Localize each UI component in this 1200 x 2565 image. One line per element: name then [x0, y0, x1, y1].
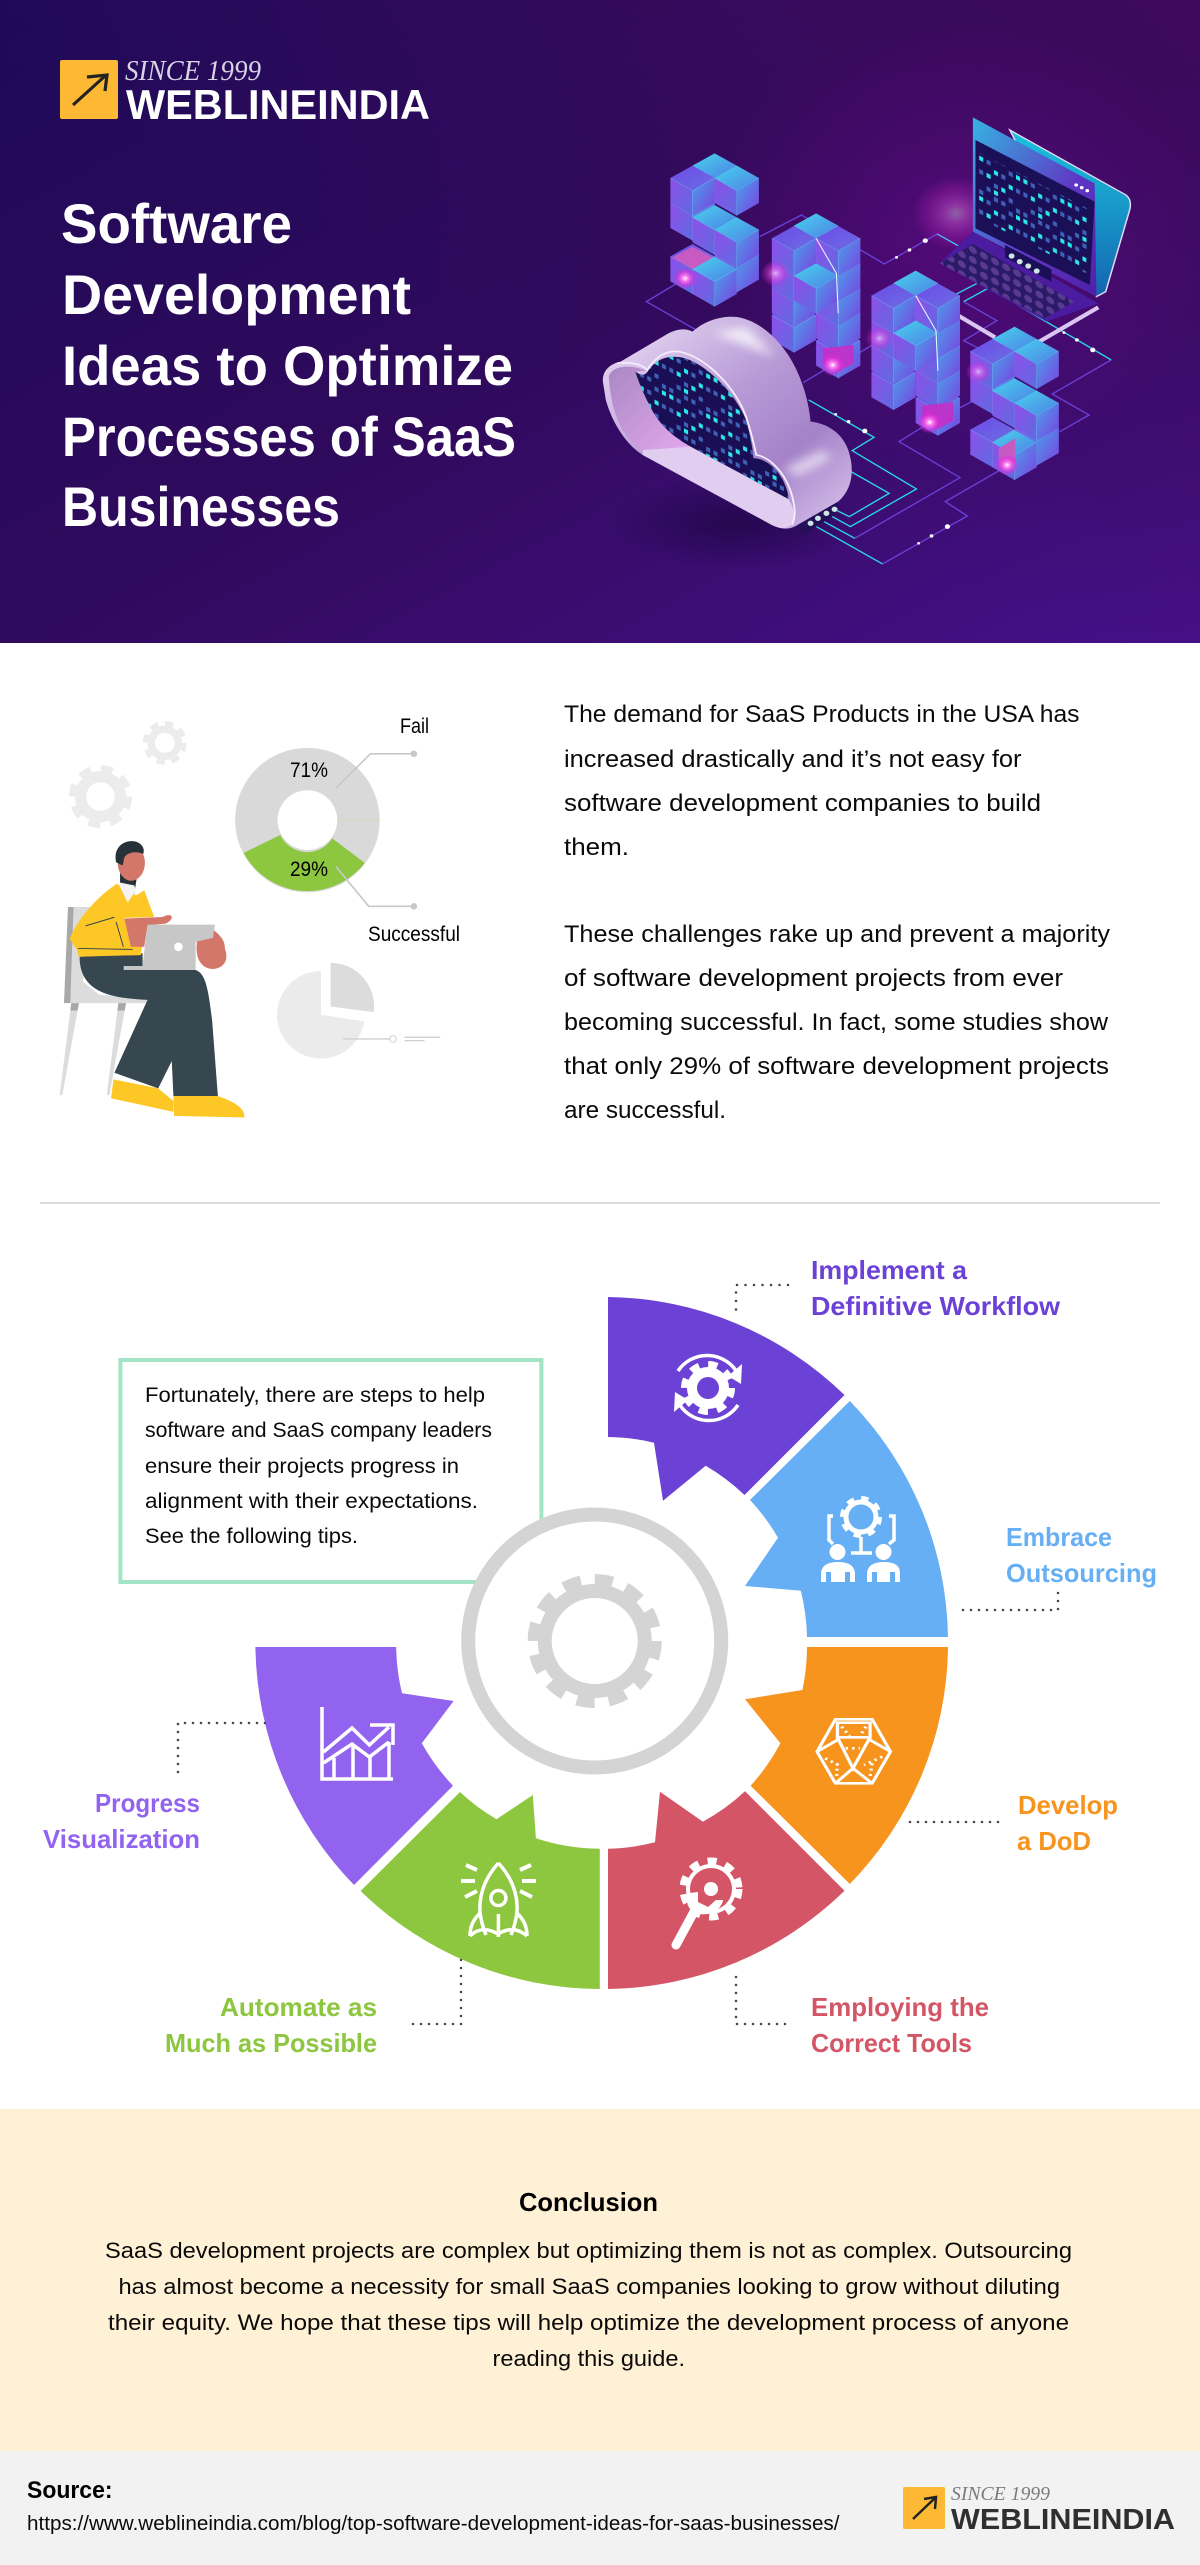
chart: donut 71% fail, 29% successful — [235, 715, 460, 946]
chart: donut 71% fail, 29% successful: Successful — [368, 923, 460, 946]
text block: intro paragraphs: them. — [564, 834, 629, 861]
label: Definitive Workflow — [811, 1291, 1061, 1321]
text block: intro paragraphs: These challenges rake up and prevent a majority — [564, 921, 1110, 948]
circuit sparks — [834, 238, 1095, 545]
logo: Weblineindia: SINCE 1999 — [125, 56, 261, 87]
icon: rocket — [461, 1863, 536, 1937]
callout: intro to tips: ensure their projects progress in — [145, 1455, 459, 1478]
icon: wrench and gear — [676, 1861, 739, 1945]
label: Progress — [95, 1788, 200, 1818]
illustration: man with tablet on a chair — [60, 841, 244, 1118]
logo: Weblineindia footer — [903, 2483, 1175, 2536]
panel: six tips wheel — [43, 1255, 1157, 2058]
label — [1017, 1790, 1118, 1856]
illustration: isometric SaaS letters, cloud and laptop — [603, 117, 1130, 570]
isometric letter A — [761, 213, 860, 378]
segment: Progress Visualization — [43, 1647, 454, 1885]
icon: team with gear — [821, 1498, 900, 1582]
leader line — [178, 1723, 265, 1775]
text block: intro paragraphs: The demand for SaaS Products in the USA has — [564, 701, 1080, 728]
label: a DoD — [1017, 1826, 1091, 1856]
text block: intro paragraphs: that only 29% of software development projects — [564, 1053, 1109, 1080]
chart: donut 71% fail, 29% successful: Fail — [400, 715, 429, 738]
logo: Weblineindia footer: WEBLINEINDIA — [951, 2504, 1175, 2536]
title: Processes of SaaS — [62, 405, 516, 468]
laptop — [912, 117, 1130, 343]
chart: donut 71% fail, 29% successful: 71% — [290, 759, 328, 782]
label: Implement a — [811, 1255, 968, 1285]
title: Ideas to Optimize — [62, 334, 513, 397]
icon: rising bar chart — [322, 1707, 393, 1779]
callout: intro to tips: See the following tips. — [145, 1525, 358, 1548]
source link: https://www.weblineindia.com/blog/top-software-development-ideas-for-saas-businesses/ — [27, 2513, 840, 2535]
segment: Implement a Definitive Workflow — [608, 1255, 1061, 1501]
text block: conclusion: SaaS development projects are complex but optimizing them is not as complex. Outsourcing — [105, 2238, 1072, 2263]
callout: intro to tips: Fortunately, there are steps to help — [145, 1384, 485, 1407]
leader line — [910, 1821, 999, 1823]
panel: 29% success section — [60, 701, 1110, 1124]
title: Businesses — [62, 475, 340, 538]
icon: gear with cycle arrows — [674, 1355, 742, 1421]
label: Employing the — [811, 1992, 989, 2022]
text block: intro paragraphs: software development companies to build — [564, 790, 1041, 817]
isometric letter S — [670, 153, 759, 307]
label — [43, 1788, 200, 1854]
panel: conclusion — [0, 2109, 1200, 2451]
title: Software — [61, 192, 292, 255]
label — [811, 1992, 989, 2058]
leader line — [736, 1977, 788, 2024]
title: Development — [62, 263, 411, 326]
label: Correct Tools — [811, 2028, 972, 2058]
text block: intro paragraphs: are successful. — [564, 1097, 726, 1124]
label — [165, 1992, 377, 2058]
illustration: pale pie chart — [277, 963, 440, 1059]
label: Embrace — [1006, 1522, 1112, 1552]
label — [1006, 1522, 1157, 1588]
text block: conclusion: has almost become a necessity for small SaaS companies looking to grow without diluting — [118, 2274, 1060, 2299]
segment: Automate as Much as Possible — [165, 1792, 600, 2058]
text block: conclusion: reading this guide. — [492, 2346, 685, 2371]
segment: Develop a DoD — [745, 1647, 1118, 1884]
logo: Weblineindia — [60, 56, 430, 128]
text block: intro paragraphs — [564, 701, 1110, 1124]
circuit lines — [646, 215, 1111, 564]
label: Outsourcing — [1006, 1558, 1157, 1588]
isometric letter A — [866, 271, 960, 436]
cloud shadow — [610, 477, 860, 570]
label: Automate as — [220, 1992, 377, 2022]
illustration: decorative gears — [72, 724, 184, 825]
label — [811, 1255, 1061, 1321]
leader line — [406, 1960, 461, 2024]
text block: conclusion: their equity. We hope that these tips will help optimize the development process of anyone — [108, 2310, 1069, 2335]
isometric letter S — [966, 327, 1059, 480]
callout: intro to tips — [120, 1360, 541, 1582]
label: Visualization — [43, 1824, 200, 1854]
cloud — [603, 317, 852, 535]
segment: Employing the Correct Tools — [608, 1791, 989, 2058]
panel: source footer — [0, 2451, 1200, 2565]
header background — [0, 0, 1200, 643]
leader line — [963, 1590, 1058, 1610]
leader line — [736, 1285, 788, 1310]
text block: conclusion — [105, 2238, 1072, 2371]
source heading: Source: — [27, 2477, 112, 2504]
text block: intro paragraphs: of software development projects from ever — [564, 965, 1063, 992]
logo: Weblineindia: WEBLINEINDIA — [126, 81, 430, 128]
panel: header — [0, 0, 1200, 643]
label: Much as Possible — [165, 2028, 377, 2058]
label: Develop — [1018, 1790, 1118, 1820]
icon: polyhedron — [817, 1719, 890, 1783]
callout: intro to tips: alignment with their expectations. — [145, 1490, 478, 1513]
title — [61, 192, 516, 538]
text block: intro paragraphs: becoming successful. In fact, some studies show — [564, 1009, 1109, 1036]
callout: intro to tips: software and SaaS company leaders — [145, 1419, 492, 1442]
heading: Conclusion — [519, 2187, 658, 2217]
logo: Weblineindia footer: SINCE 1999 — [951, 2483, 1050, 2505]
text block: intro paragraphs: increased drastically and it’s not easy for — [564, 746, 1022, 773]
icon: central gear in ring — [468, 1514, 721, 1768]
chart: donut 71% fail, 29% successful: 29% — [290, 858, 328, 881]
segment: Embrace Outsourcing — [745, 1401, 1157, 1637]
